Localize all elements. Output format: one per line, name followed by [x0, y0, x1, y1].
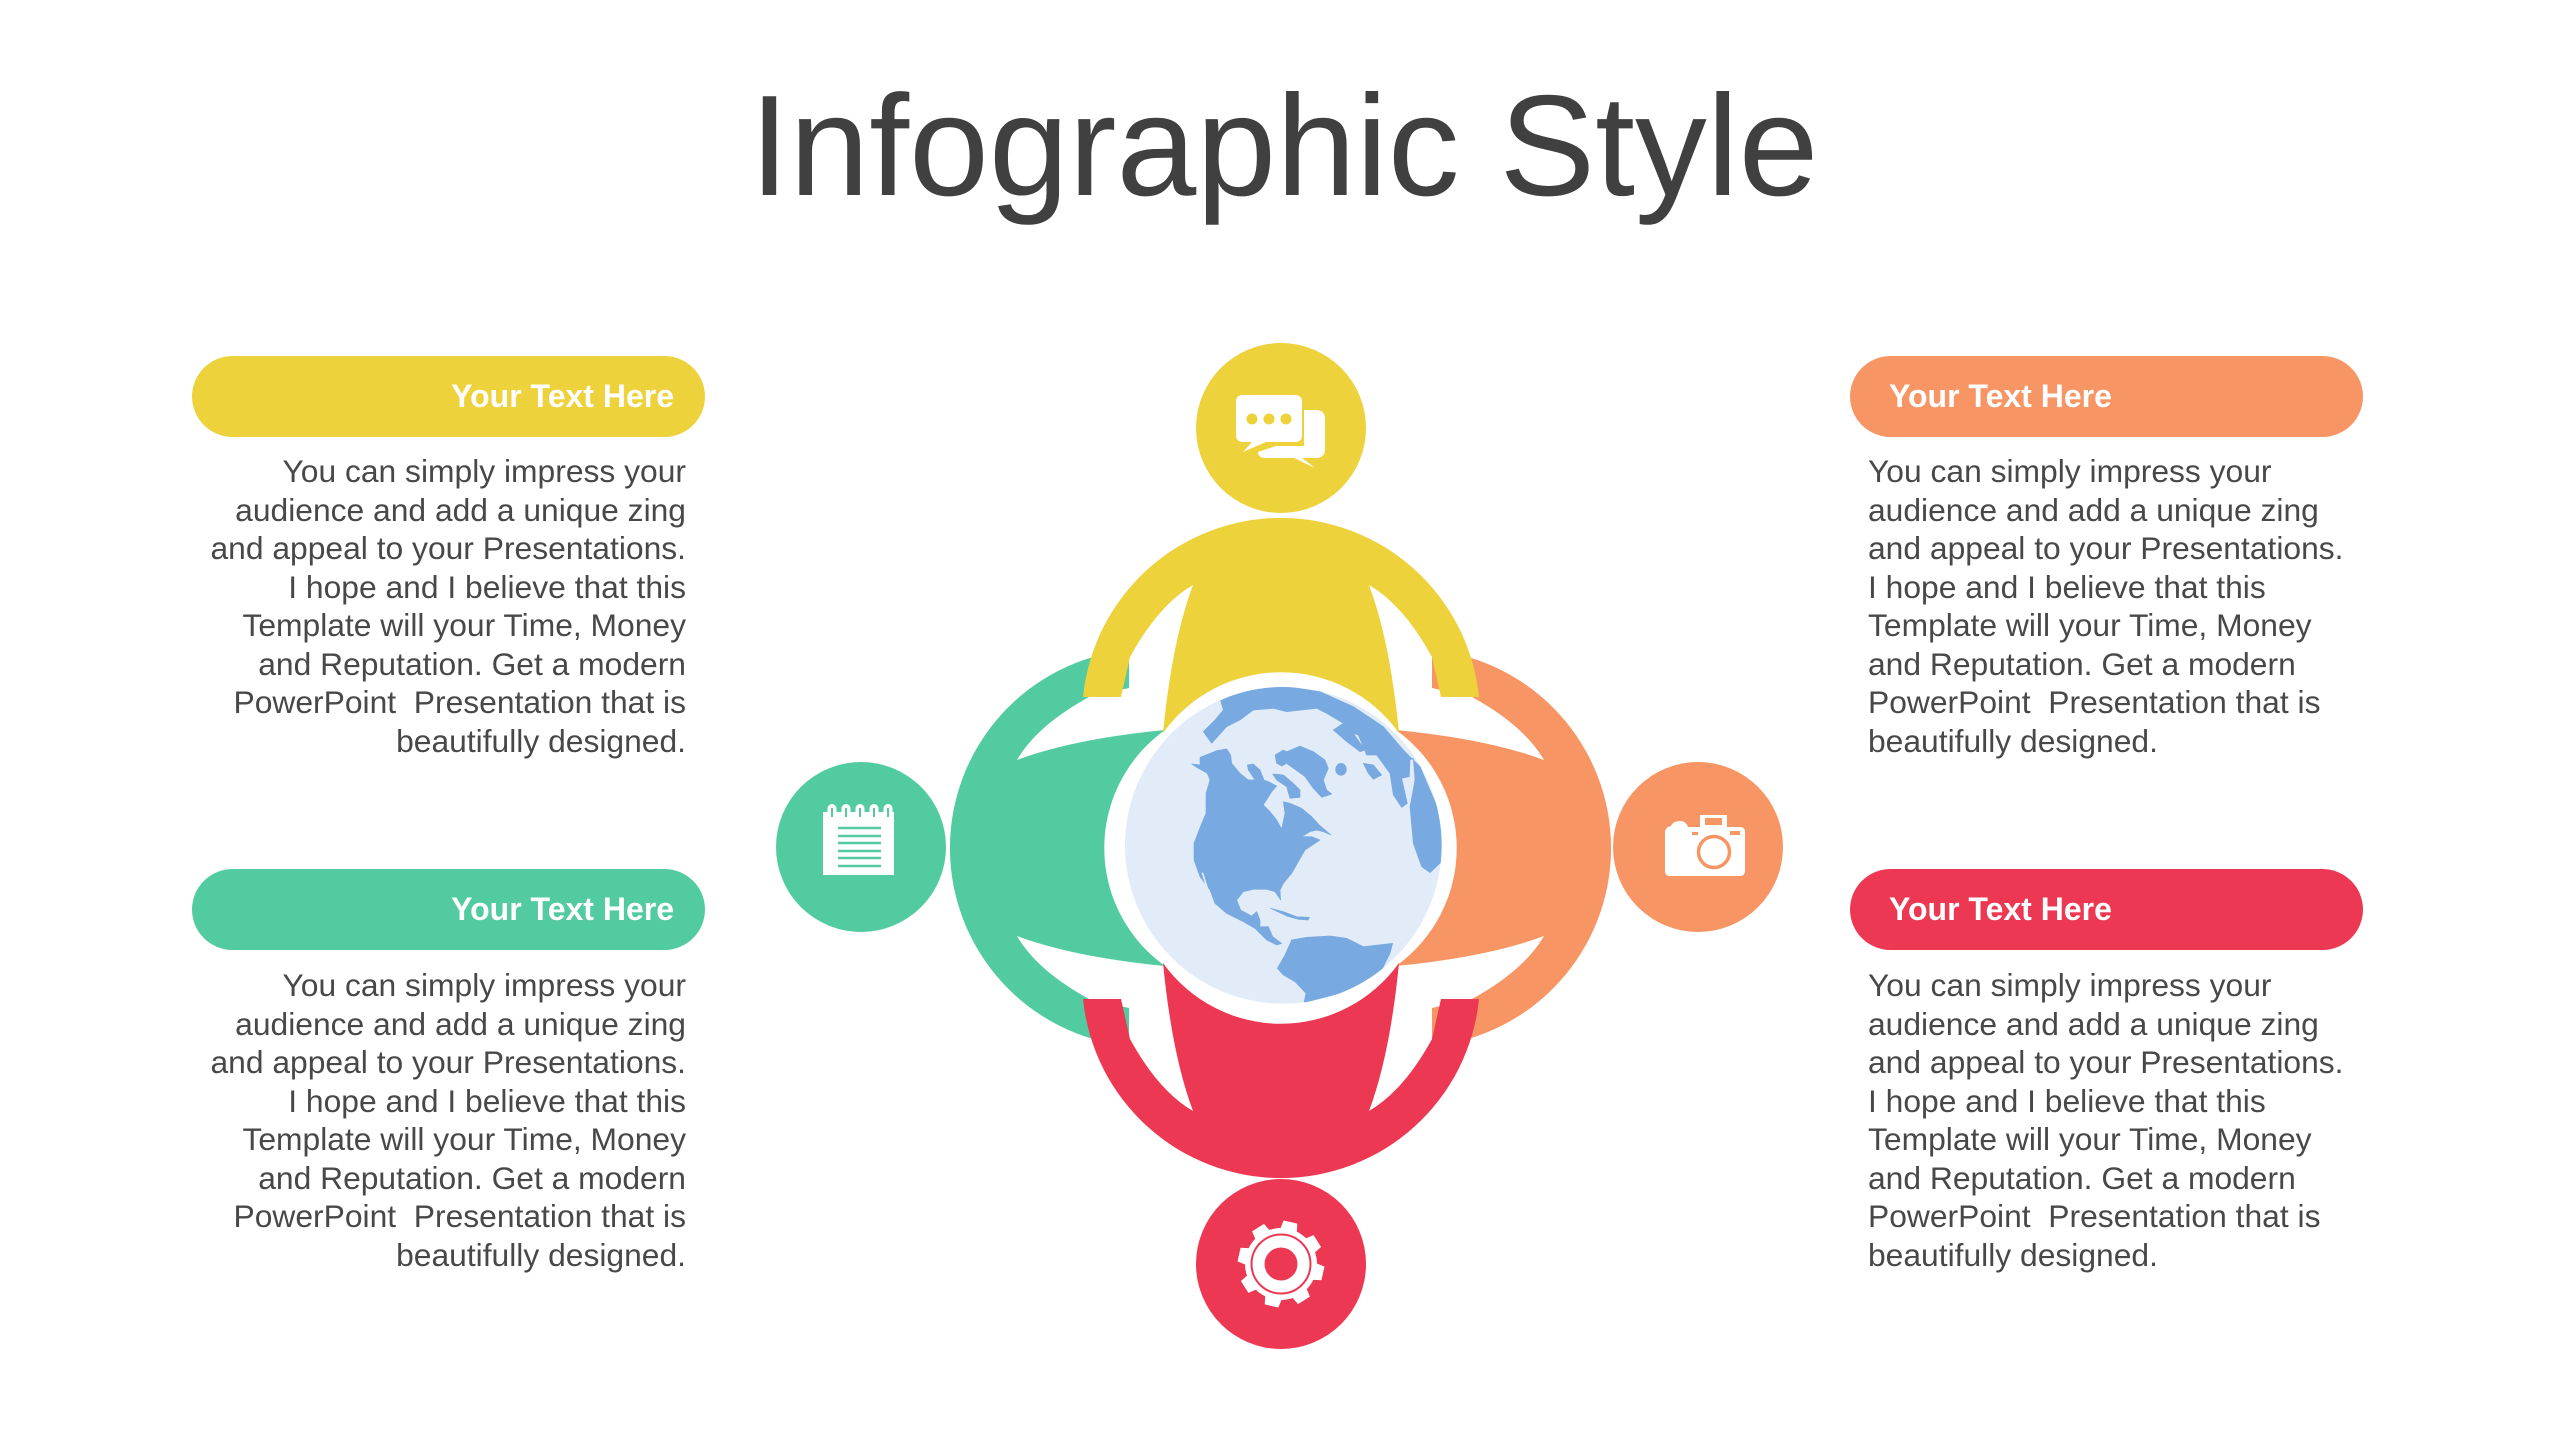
text block: bottom-left: You can simply impress your audience and add a unique zing and appeal to your Presentations. I hope and I believe that this Template will your Time, Money and Reputation. Get a modern PowerPoint Presentation that is beautifully designed.: [210, 967, 686, 1273]
panel heading: yellow top-left: [192, 356, 705, 437]
icon circle: notepad: [776, 762, 946, 932]
eurasia and arctic: [1203, 687, 1445, 873]
panel heading: yellow top-left: Your Text Here: [451, 378, 674, 414]
globe ocean: [1125, 687, 1442, 1004]
scandinavian islands: [1363, 763, 1382, 779]
text block: bottom-right: You can simply impress your audience and add a unique zing and appeal to your Presentations. I hope and I believe that this Template will your Time, Money and Reputation. Get a modern PowerPoint Presentation that is beautifully designed.: [1868, 967, 2344, 1273]
icon: camera: [1665, 815, 1745, 876]
figure: red person: [1083, 963, 1479, 1178]
icon circle: chat: [1196, 343, 1366, 513]
panel heading: green bottom-left: [192, 869, 705, 950]
caribbean islands: [1271, 908, 1309, 920]
text block: top-left: You can simply impress your audience and add a unique zing and appeal to your Presentations. I hope and I believe that this Template will your Time, Money and Reputation. Get a modern PowerPoint Presentation that is beautifully designed.: [210, 453, 686, 759]
central diagram: [776, 343, 1783, 1349]
figure: orange person: [1396, 650, 1611, 1046]
panel heading: orange top-right: [1850, 356, 2363, 437]
greenland: [1275, 746, 1332, 797]
panel heading: green bottom-left: Your Text Here: [451, 891, 674, 927]
baja notch: [1202, 873, 1207, 888]
panel heading: orange top-right: Your Text Here: [1889, 378, 2112, 414]
title: Infographic Style: [750, 66, 1818, 226]
north america: [1192, 749, 1331, 945]
south america: [1277, 936, 1393, 1003]
globe: [1125, 687, 1445, 1004]
text block: top-right: You can simply impress your audience and add a unique zing and appeal to your Presentations. I hope and I believe that this Template will your Time, Money and Reputation. Get a modern PowerPoint Presentation that is beautifully designed.: [1868, 453, 2344, 759]
baffin island: [1273, 774, 1300, 798]
icon circle: gear: [1196, 1179, 1366, 1349]
figure: yellow person: [1083, 518, 1479, 733]
iceland: [1336, 763, 1346, 775]
icon: speech bubbles: [1236, 395, 1325, 468]
icon: notepad: [823, 804, 894, 875]
figure: green person: [950, 650, 1165, 1046]
panel heading: red bottom-right: Your Text Here: [1889, 891, 2112, 927]
panel heading: red bottom-right: [1850, 869, 2363, 950]
icon: gear: [1237, 1220, 1325, 1308]
icon circle: camera: [1613, 762, 1783, 932]
globe continents: [1192, 687, 1445, 1003]
